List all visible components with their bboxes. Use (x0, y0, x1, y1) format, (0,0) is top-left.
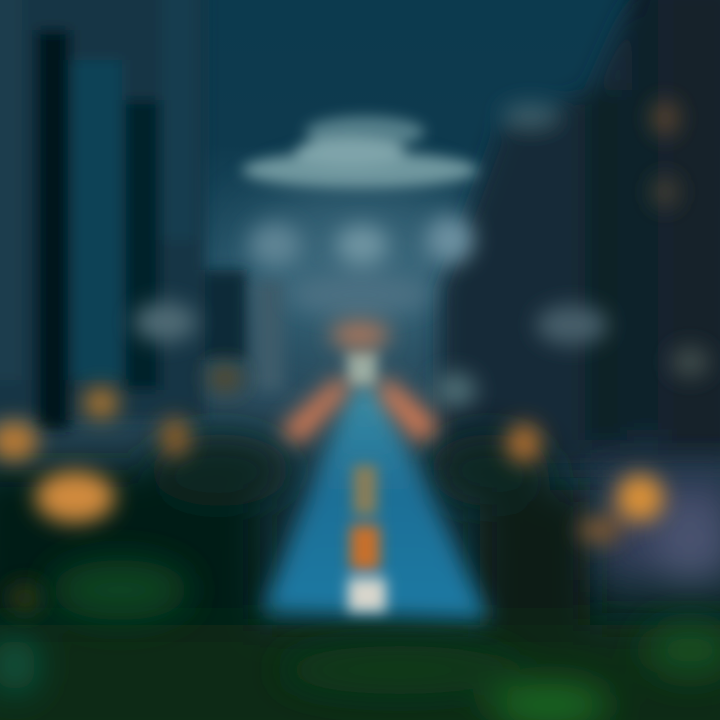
foliage highlights (0, 560, 720, 720)
orange lights (0, 100, 679, 614)
cloud (242, 116, 478, 188)
canal edge glow (280, 321, 440, 445)
building haze patches (133, 302, 710, 408)
buildings: left (0, 0, 284, 430)
canal: blue water (262, 385, 490, 620)
lower cloud puffs (249, 216, 474, 315)
canal: center strip (347, 350, 386, 612)
ground: dark greenery (0, 434, 720, 720)
sky glow (240, 190, 480, 330)
buildings: right (440, 0, 720, 470)
street: right side (600, 470, 720, 584)
